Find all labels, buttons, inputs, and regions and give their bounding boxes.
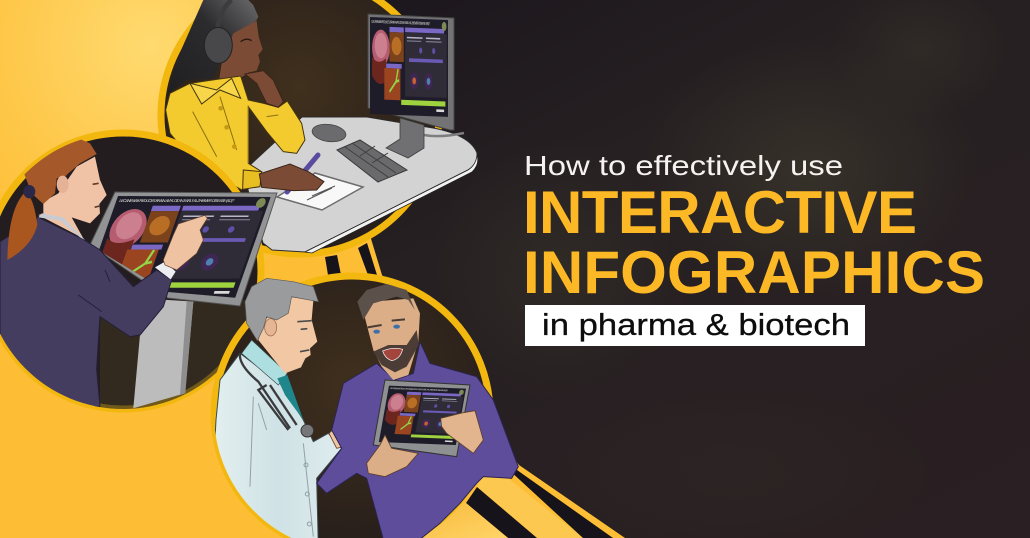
jacket folds: [78, 270, 110, 370]
man in purple shirt: [317, 284, 518, 538]
headline text: [523, 150, 985, 346]
writing hand: [259, 164, 324, 191]
left circle: woman at kiosk: [0, 133, 277, 420]
headphones: [216, 0, 232, 37]
hair: [357, 284, 415, 320]
kiosk screen: [82, 192, 277, 306]
jacket: [0, 217, 172, 407]
shirt: [317, 342, 518, 538]
desk edge: [305, 155, 478, 253]
circle backdrop: [161, 0, 439, 254]
monitor: [368, 14, 454, 130]
collar: [38, 213, 85, 240]
hair: [168, 0, 258, 94]
subtitle box: in pharma & biotech: [542, 307, 850, 342]
chest piece: [301, 424, 314, 437]
shirt folds and buttons: [193, 97, 278, 163]
raised hand: [245, 71, 283, 107]
monitor stand and cable: [386, 118, 464, 158]
tie: [277, 375, 303, 420]
top circle: woman at desk: [161, 0, 478, 254]
brows: [368, 319, 405, 327]
scrunchie: [23, 185, 35, 198]
upper stripes: [325, 243, 377, 275]
pointing hand: [329, 413, 386, 448]
hair: [245, 278, 318, 341]
ear: [57, 176, 69, 193]
subtitle box: [525, 305, 865, 346]
circle backdrop: [214, 276, 490, 538]
keyboard: [337, 140, 407, 182]
face: [258, 297, 317, 373]
cuff: [243, 170, 262, 189]
yellow swoosh background: [0, 0, 625, 538]
collar: [190, 78, 241, 104]
lower stripes: [420, 470, 613, 538]
woman: [0, 136, 207, 407]
bottom circle: doctor and colleague: [213, 276, 518, 538]
ear: [265, 319, 277, 336]
eye and mouth: [93, 183, 99, 207]
mouth: [383, 348, 403, 361]
hands holding tablet: [367, 411, 483, 477]
brow, eye, mouth: [297, 321, 312, 352]
intro line: How to effectively use: [524, 150, 843, 181]
title line 1: INTERACTIVE: [523, 179, 917, 246]
desk: [248, 117, 477, 252]
tablet: [373, 380, 470, 457]
circle backdrop: [0, 133, 261, 409]
cuff: [155, 262, 176, 279]
woman at desk: [166, 0, 324, 191]
ear cup: [204, 27, 232, 63]
white coat: [213, 353, 342, 538]
coat details: [250, 397, 313, 537]
beard: [373, 330, 419, 372]
stethoscope: [240, 353, 297, 430]
hand: [163, 215, 207, 270]
doctor: [215, 278, 341, 538]
ponytail: [7, 193, 37, 260]
title line 2: INFOGRAPHICS: [523, 239, 985, 306]
notebook: [277, 173, 363, 210]
face and neck: [217, 21, 263, 97]
mouse: [311, 122, 347, 144]
hair: [24, 136, 97, 204]
eye: [241, 39, 252, 42]
collar: [242, 340, 287, 385]
pen: [287, 155, 318, 192]
eyes: [373, 325, 400, 334]
neck and face: [363, 298, 420, 380]
neck and face: [38, 157, 107, 238]
yellow shirt: [166, 76, 305, 190]
kiosk stand: [100, 300, 246, 409]
